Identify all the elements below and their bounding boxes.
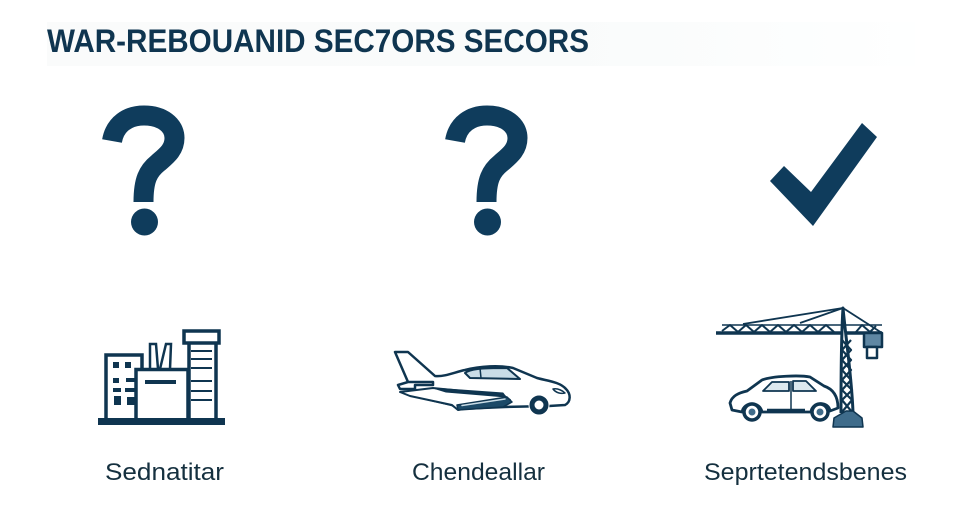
icon: check mark [770,123,877,226]
header band [47,22,915,66]
label: first sector: Sednatitar [105,459,224,486]
icon: question mark 1 [112,116,174,236]
title: WAR-REBOUANID SEC7ORS SECORS [47,23,589,59]
label: second sector: Chendeallar [412,459,545,486]
icon: factory buildings [98,331,225,425]
icon: crane and car [716,308,882,427]
icon: question mark 2 [455,116,518,236]
label: third sector: Seprtetendsbenes [704,459,907,486]
icon: plane-car hybrid [395,352,570,415]
